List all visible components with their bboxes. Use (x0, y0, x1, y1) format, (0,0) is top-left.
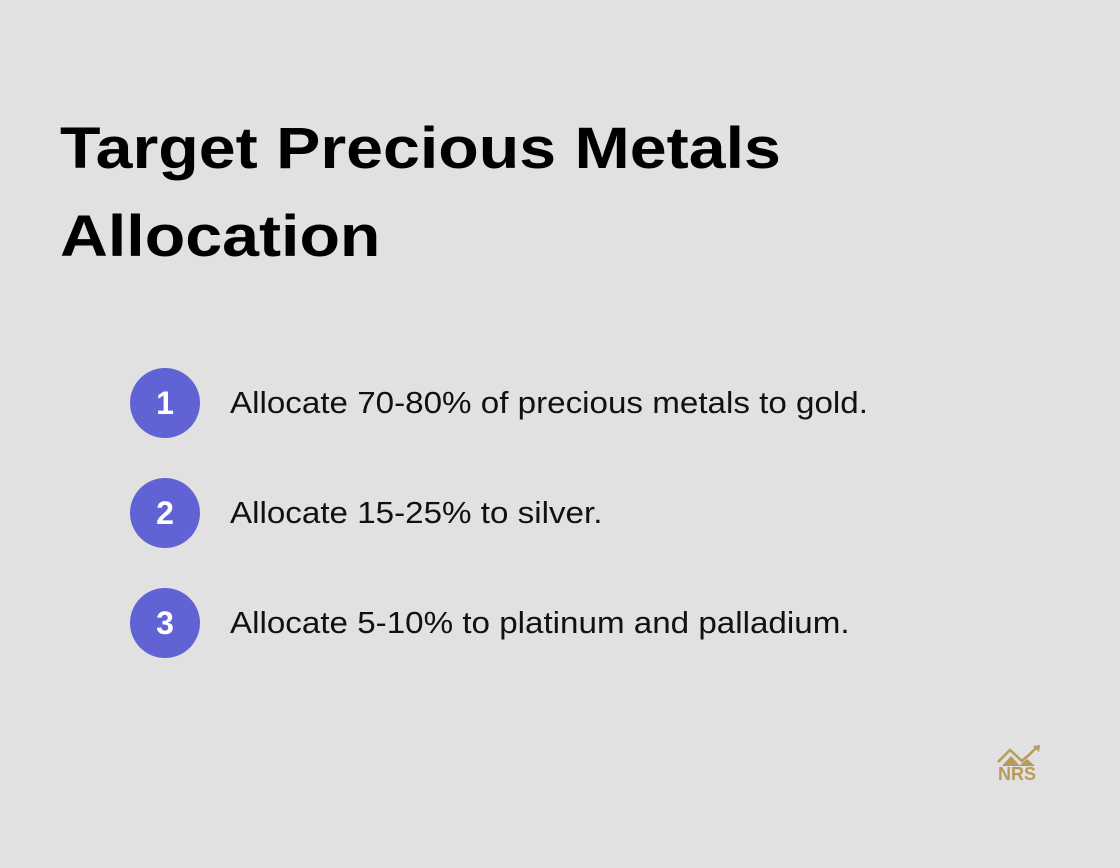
number 1 (130, 368, 200, 438)
item 3 (130, 588, 850, 658)
logo: NRS (997, 745, 1040, 784)
text 3: Allocate 5-10% to platinum and palladium. (230, 605, 850, 640)
number 3 (130, 588, 200, 658)
title: Allocation (60, 204, 380, 269)
text 2: Allocate 15-25% to silver. (230, 495, 602, 530)
item 2 (130, 478, 602, 548)
logo: NRS: NRS (998, 764, 1036, 784)
number 1: 1 (156, 385, 174, 421)
number 2 (130, 478, 200, 548)
title: Target Precious Metals (60, 116, 781, 181)
item 1 (130, 368, 868, 438)
number 2: 2 (156, 495, 174, 531)
title (60, 116, 781, 269)
number 3: 3 (156, 605, 174, 641)
text 1: Allocate 70-80% of precious metals to gold. (230, 385, 868, 420)
